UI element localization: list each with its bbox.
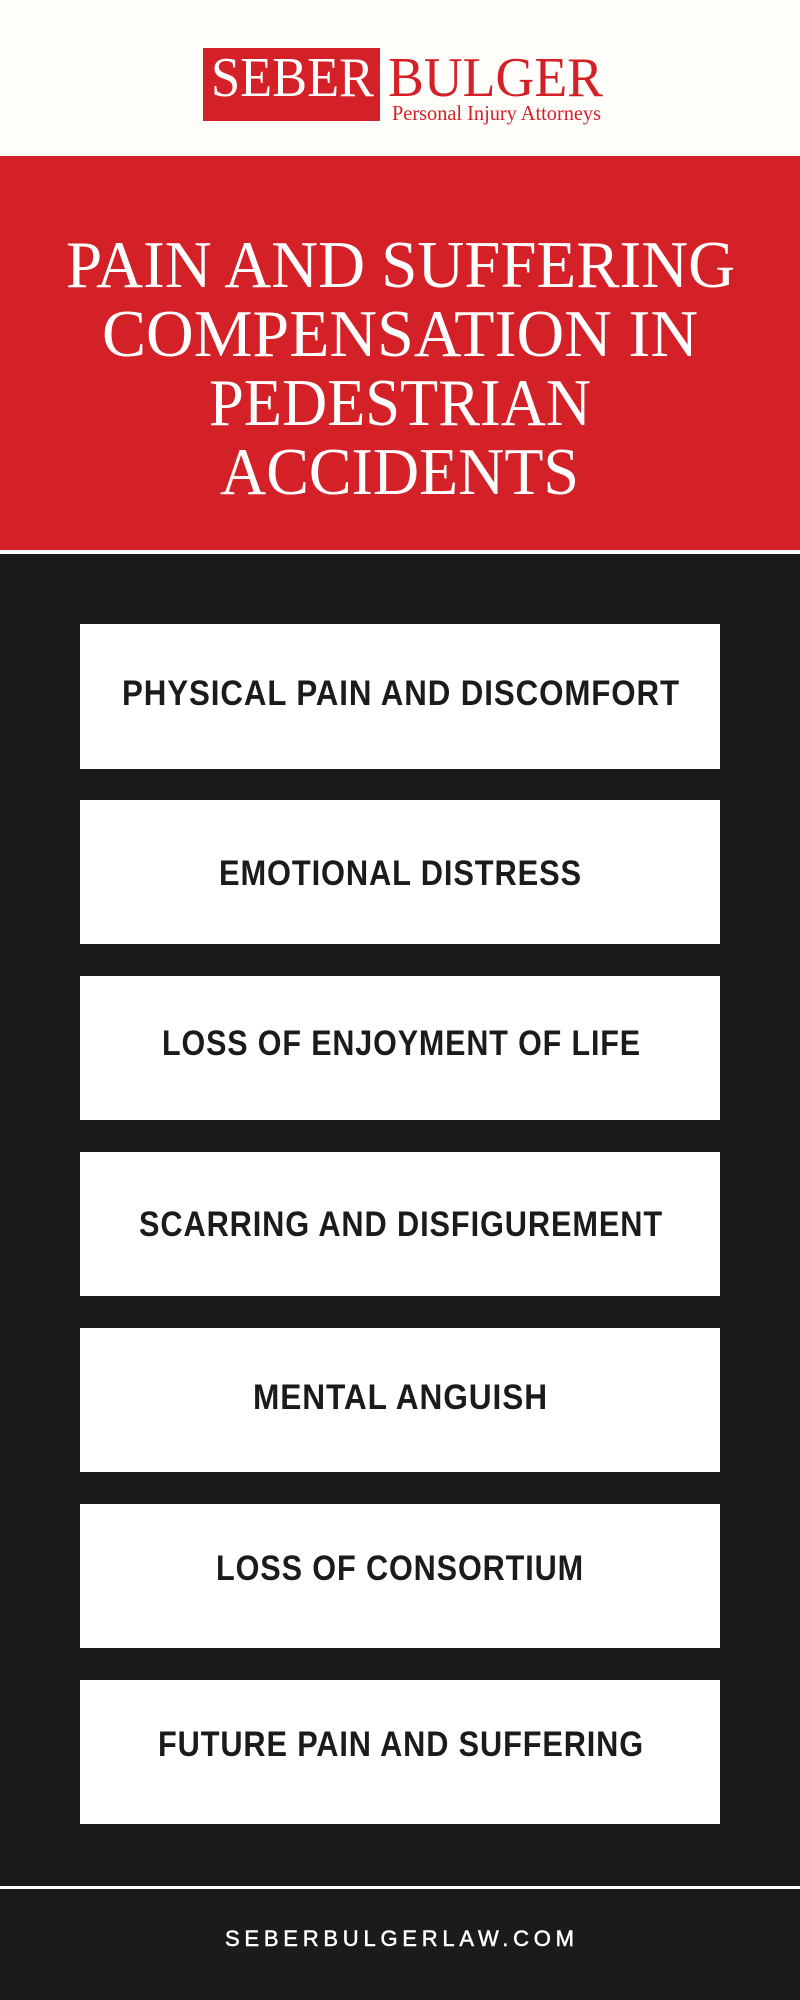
title text <box>66 228 735 509</box>
logo: Seber Bulger: Personal Injury Attorneys <box>392 101 601 125</box>
title text: ACCIDENTS <box>220 435 579 509</box>
card: loss of enjoyment of life: LOSS OF ENJOYMENT OF LIFE <box>162 1024 641 1063</box>
footer website address: SEBERBULGERLAW.COM <box>225 1926 574 1951</box>
title text: COMPENSATION IN <box>102 297 698 371</box>
header band with logo <box>0 0 800 156</box>
card: physical pain and discomfort: PHYSICAL PAIN AND DISCOMFORT <box>122 674 680 713</box>
card: future pain and suffering: FUTURE PAIN AND SUFFERING <box>158 1725 644 1764</box>
card: scarring and disfigurement: SCARRING AND DISFIGUREMENT <box>139 1205 663 1244</box>
card: emotional distress <box>80 800 720 944</box>
card: mental anguish <box>80 1328 720 1472</box>
card: emotional distress: EMOTIONAL DISTRESS <box>219 854 582 893</box>
card: loss of consortium <box>80 1504 720 1648</box>
dark body panel with list of damages <box>0 554 800 1886</box>
title text: PEDESTRIAN <box>209 366 591 440</box>
logo: Seber Bulger <box>203 47 604 125</box>
card: loss of consortium: LOSS OF CONSORTIUM <box>216 1549 584 1588</box>
card: future pain and suffering <box>80 1680 720 1824</box>
card: mental anguish: MENTAL ANGUISH <box>253 1378 548 1417</box>
title text: PAIN AND SUFFERING <box>66 228 735 302</box>
title panel <box>0 156 800 554</box>
logo: Seber Bulger: BULGER <box>388 47 604 109</box>
card: scarring and disfigurement <box>80 1152 720 1296</box>
card: physical pain and discomfort <box>80 624 720 769</box>
footer band <box>0 1886 800 1951</box>
card: loss of enjoyment of life <box>80 976 720 1120</box>
logo: Seber Bulger: SEBER <box>211 47 375 109</box>
